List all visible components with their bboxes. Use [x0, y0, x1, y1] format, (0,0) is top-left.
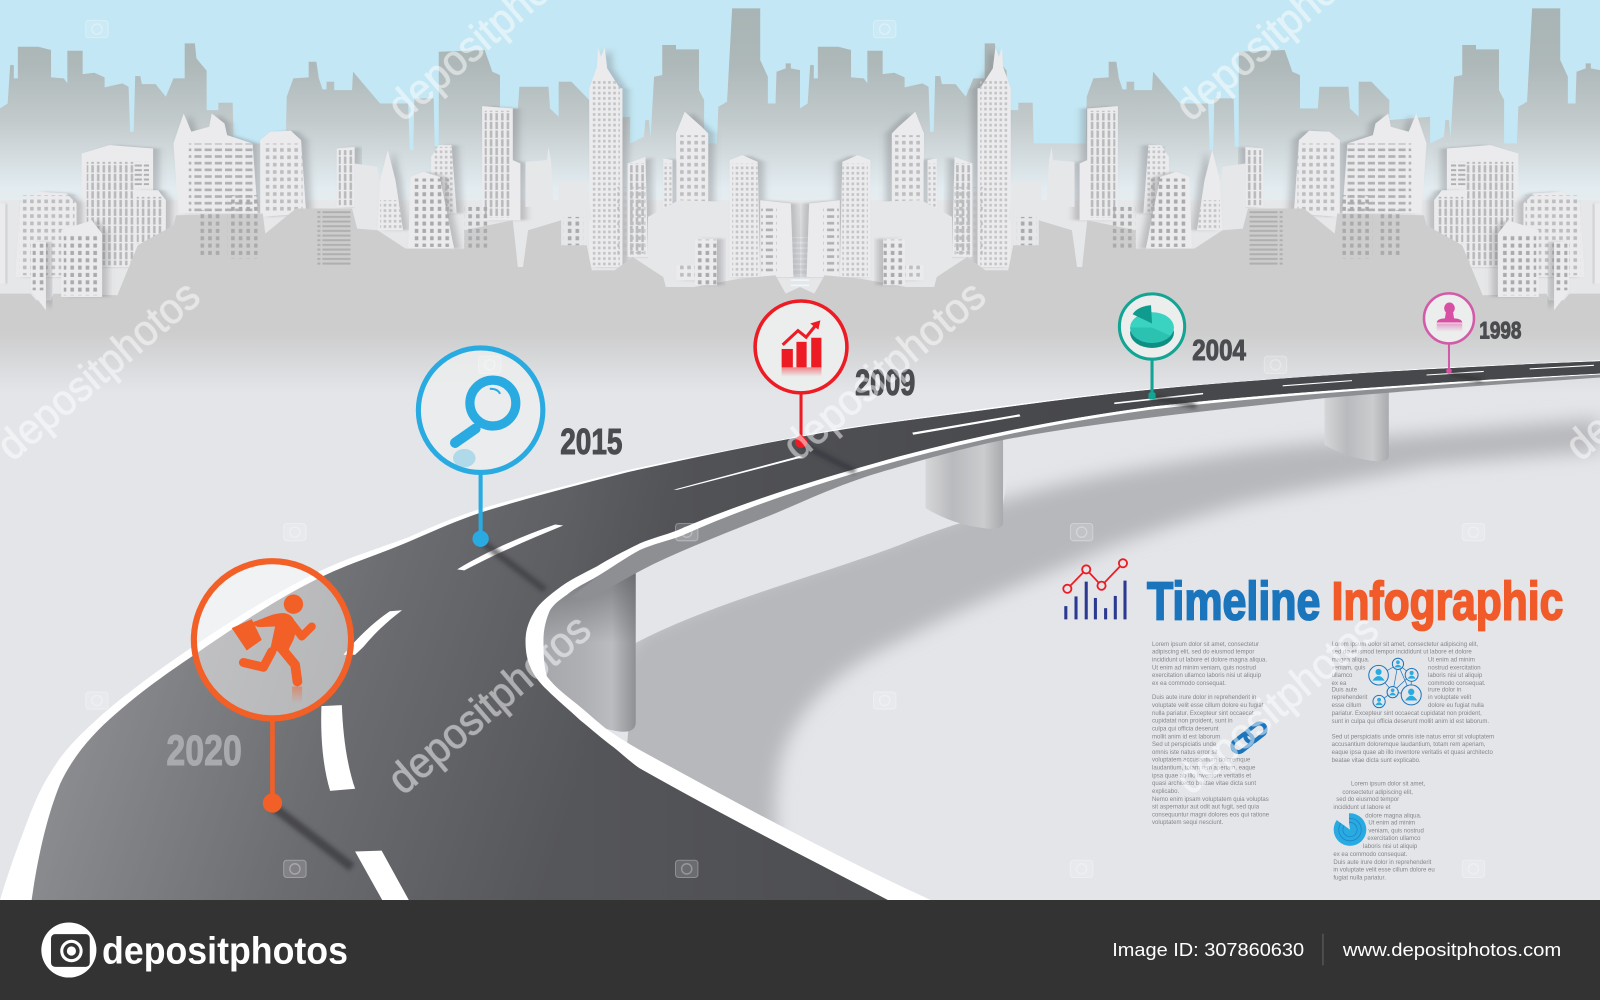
text block: left column: culpa qui officia deserunt — [1152, 726, 1219, 732]
depositphotos watermark text: depositphotos — [773, 271, 995, 470]
icon: magnifier — [453, 380, 516, 467]
text block: left column: voluptatem accusantium doloremque — [1152, 758, 1251, 764]
road white edge lines — [0, 360, 1600, 900]
text block: right column: accusantium doloremque laudantium, totam rem aperiam, — [1332, 742, 1486, 748]
road centre dashes — [321, 365, 1594, 908]
text block: right column: Sed ut perspiciatis unde omnis iste natus error sit voluptatem — [1332, 735, 1494, 741]
watermark camera marks — [86, 20, 1485, 878]
text block: left column: Lorem ipsum dolor sit amet, consectetur — [1152, 642, 1259, 648]
text block: right column: in voluptate velit — [1428, 695, 1472, 701]
text block: left column: adipiscing elit, sed do eiusmod tempor — [1152, 650, 1254, 656]
icon: person — [1437, 303, 1462, 332]
text block: right column: sed do eiusmod tempor incididunt ut labore et dolore — [1332, 650, 1472, 656]
year 2009: 2009 — [855, 363, 915, 403]
year 2004: 2004 — [1192, 335, 1246, 367]
text block: right column: magna aliqua. — [1332, 658, 1370, 664]
ground shadow of the elevated road — [627, 412, 1600, 827]
text block: right column: Ut enim ad minim — [1428, 658, 1475, 664]
text block: lower column: dolore magna aliqua. — [1365, 813, 1422, 819]
icon: chain link — [1230, 721, 1268, 755]
text block: left column: laudantium, totam rem aperiam, eaque — [1152, 765, 1256, 771]
text block: lower column: ex ea commodo consequat. — [1333, 852, 1408, 858]
text block: left column: Duis aute irure dolor in reprehenderit in — [1152, 695, 1256, 701]
text block: right column: irure dolor in — [1428, 688, 1461, 694]
text block: right column: commodo consequat. — [1428, 681, 1486, 687]
divider — [1322, 934, 1324, 965]
text block: left column: omnis iste natus error sit — [1152, 750, 1218, 756]
text block: lower column: in voluptate velit esse cillum dolore eu — [1333, 867, 1435, 873]
text block: left column: consequuntur magni dolores eos qui ratione — [1152, 812, 1270, 818]
icon: rising bar chart — [782, 320, 821, 377]
road side fascia — [571, 367, 1600, 600]
text block: right column: laboris nisi ut aliquip — [1428, 673, 1483, 679]
text block: lower column: incididunt ut labore et — [1333, 805, 1391, 811]
road asphalt — [32, 361, 1600, 900]
pillar 1 — [541, 551, 636, 732]
text block: right column: reprehenderit — [1332, 695, 1368, 701]
pin 2004 — [1119, 294, 1196, 406]
text block: lower column — [1333, 782, 1435, 882]
text block: lower column: laboris nisi ut aliquip — [1363, 844, 1418, 850]
year 1998: 1998 — [1479, 317, 1521, 344]
text block: left column: cupidatat non proident, sunt in — [1152, 719, 1233, 725]
text block: left column: incididunt ut labore et dolore magna aliqua. — [1152, 658, 1267, 664]
sky background — [0, 0, 1600, 265]
text block: left column: Nemo enim ipsam voluptatem quia voluptas — [1152, 797, 1269, 803]
text block: right column: dolore eu fugiat nulla — [1428, 703, 1485, 709]
text block: left column: Sed ut perspiciatis unde — [1152, 742, 1217, 748]
text block: left column: voluptatem sequi nesciunt. — [1152, 820, 1224, 826]
text block: right column: veniam, quis — [1332, 665, 1365, 671]
text block: right column — [1332, 642, 1494, 764]
text block: right column: nostrud exercitation — [1428, 665, 1481, 671]
text block: lower column: Lorem ipsum dolor sit amet, — [1351, 782, 1426, 788]
text block: right column: Duis aute — [1332, 688, 1358, 694]
year 2020: 2020 — [166, 727, 242, 775]
pin 1998 — [1424, 293, 1482, 381]
text block: lower column: Duis aute irure dolor in reprehenderit — [1333, 860, 1432, 866]
text block: right column: sunt in culpa qui officia deserunt mollit anim id est laborum. — [1332, 719, 1489, 725]
text block: left column: quasi architecto beatae vitae dicta sunt — [1152, 781, 1256, 787]
logo wordmark: depositphotos — [102, 929, 348, 971]
title: Timeline: Timeline — [1147, 571, 1320, 631]
footer bar — [0, 900, 1600, 1000]
depositphotos watermark text: depositphotos — [378, 605, 600, 804]
text block: right column: ullamco — [1332, 673, 1353, 679]
text block: right column: beatae vitae dicta sunt explicabo. — [1332, 758, 1421, 764]
road pillars — [541, 388, 1389, 732]
text block: left column: sit aspernatur aut odit aut fugit, sed quia — [1152, 805, 1260, 811]
text block: left column: Ut enim ad minim veniam, quis nostrud — [1152, 665, 1256, 671]
text block: lower column: exercitation ullamco — [1367, 836, 1421, 842]
text block: left column: exercitation ullamco laboris nisi ut aliquip — [1152, 673, 1262, 679]
text block: lower column: fugiat nulla pariatur. — [1333, 876, 1386, 882]
text block: lower column: sed do eiusmod tempor — [1336, 797, 1399, 803]
text block: left column — [1152, 642, 1270, 826]
text block: left column: ex ea commodo consequat. — [1152, 681, 1226, 687]
back skyline — [0, 8, 1600, 234]
image id: Image ID: 307860630 — [1112, 939, 1304, 960]
text block: left column: nulla pariatur. Excepteur sint occaecat — [1152, 711, 1254, 717]
text block: lower column: veniam, quis nostrud — [1368, 829, 1424, 835]
text block: right column: esse cillum — [1332, 703, 1361, 709]
text block: left column: mollit anim id est laborum — [1152, 734, 1220, 740]
text block: right column: Lorem ipsum dolor sit amet, consectetur adipiscing elit, — [1332, 642, 1478, 648]
text block: left column: explicabo. — [1152, 789, 1179, 795]
pin 2020 — [194, 561, 352, 867]
text block: right column: eaque ipsa quae ab illo inventore veritatis et quasi architecto — [1332, 750, 1493, 756]
text block: lower column: Ut enim ad minim — [1368, 821, 1415, 827]
icon: running man — [232, 594, 312, 703]
icon: pie chart — [1130, 305, 1174, 348]
pillar 3 — [1324, 388, 1389, 461]
website: www.depositphotos.com — [1342, 939, 1561, 960]
icon: line and bar chart — [1063, 559, 1127, 619]
year 2015: 2015 — [560, 422, 622, 462]
text block: left column: ipsa quae ab illo inventore veritatis et — [1152, 773, 1251, 779]
depositphotos watermark text: depositphotos — [1166, 605, 1387, 804]
front paper-cut city skyline — [0, 47, 1600, 327]
pin 2009 — [755, 301, 855, 471]
icon: people network — [1369, 658, 1421, 708]
text block: right column: ex ea — [1332, 681, 1347, 687]
pillar 2 — [926, 434, 1003, 529]
ground plane — [0, 255, 1600, 908]
logo mark — [41, 922, 96, 978]
text block: left column: voluptate velit esse cillum dolore eu fugiat — [1152, 703, 1264, 709]
heading block — [1063, 559, 1563, 631]
pin 2015 — [418, 348, 545, 590]
text block: right column: pariatur. Excepteur sint occaecat cupidatat non proident, — [1332, 711, 1482, 717]
text block: lower column: consectetur adipiscing elit, — [1342, 790, 1413, 796]
icon: radial pie — [1334, 812, 1366, 846]
